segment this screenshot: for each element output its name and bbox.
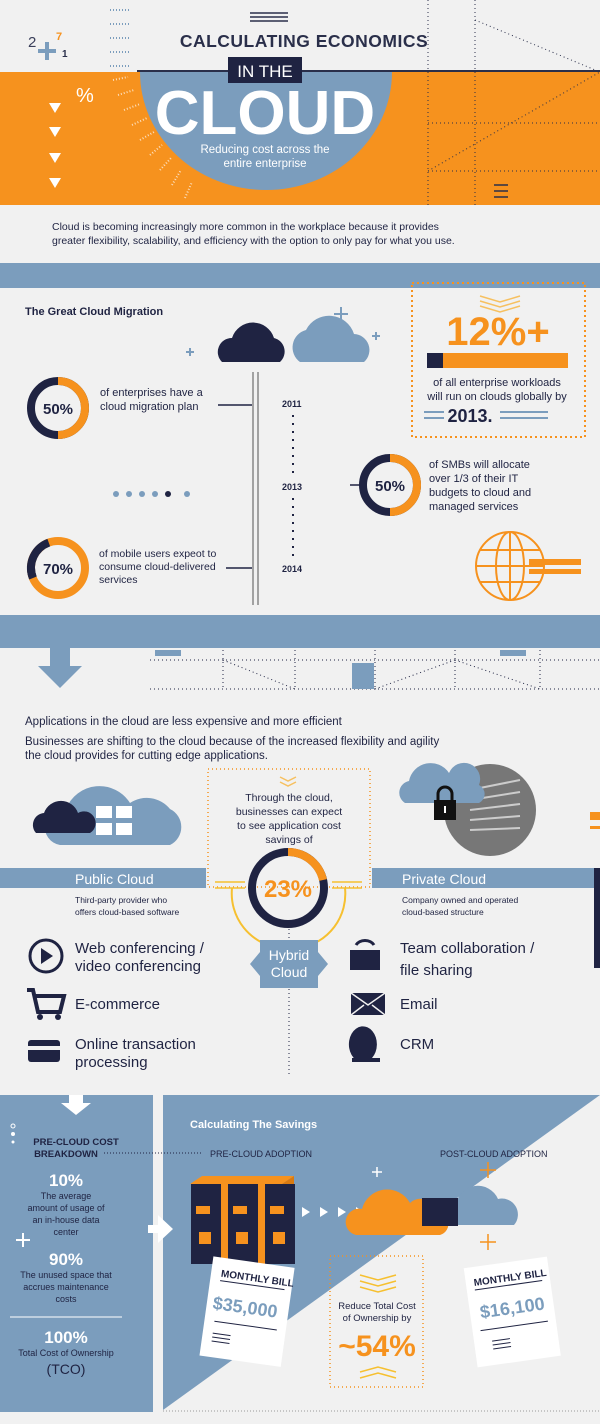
panel: calculating the savings: PRE-CLOUD ADOPTION xyxy=(210,1149,312,1159)
donut 50% SMB xyxy=(350,458,417,512)
icon: percent and arrows xyxy=(49,85,94,188)
heading: applications xyxy=(25,716,439,762)
dots xyxy=(113,491,190,497)
timeline: 2013 xyxy=(282,482,302,492)
callout 12%: will run on clouds globally by xyxy=(426,391,567,403)
donut 70%: 70% xyxy=(43,561,73,578)
text: public cloud desc: Third-party provider who xyxy=(75,895,167,905)
heading: applications: the cloud provides for cutting edge applications. xyxy=(25,750,268,762)
hybrid cloud: Cloud xyxy=(271,964,307,980)
bill $35,000: MONTHLY BILL xyxy=(220,1269,294,1290)
bar: private cloud: Private Cloud xyxy=(402,871,486,887)
divider bar 2 xyxy=(0,615,600,648)
panel: pre-cloud cost breakdown: BREAKDOWN xyxy=(34,1149,98,1160)
panel: pre-cloud cost breakdown: Total Cost of Ownership xyxy=(18,1348,114,1358)
list: public apps xyxy=(27,940,205,1071)
bill $16,100: MONTHLY BILL xyxy=(473,1268,547,1289)
decor right edge xyxy=(590,812,600,968)
callout 23%: to see application cost xyxy=(237,820,341,832)
timeline xyxy=(253,372,302,605)
panel: pre-cloud cost breakdown: 100% xyxy=(44,1328,88,1347)
divider bar xyxy=(0,263,600,288)
list: private apps xyxy=(349,940,535,1062)
icon: clouds xyxy=(186,307,380,362)
panel: calculating the savings xyxy=(104,1095,600,1411)
bill $16,100 xyxy=(464,1257,561,1367)
panel: calculating the savings: Calculating The Savings xyxy=(190,1119,317,1131)
timeline: 2011 xyxy=(282,399,302,409)
callout ~54% xyxy=(330,1256,423,1387)
bill $35,000: $35,000 xyxy=(212,1293,279,1322)
list: public apps: processing xyxy=(75,1054,148,1071)
list: public apps: E-commerce xyxy=(75,996,160,1013)
bar: public cloud: Public Cloud xyxy=(75,871,154,887)
text: public cloud desc xyxy=(75,895,180,917)
heading: applications: Businesses are shifting to the cloud because of the increased flexibility and agility xyxy=(25,736,439,748)
panel: pre-cloud cost breakdown: (TCO) xyxy=(47,1361,85,1377)
callout 23%: Through the cloud, xyxy=(245,792,333,804)
title: Reducing cost across the xyxy=(200,144,330,156)
text: public cloud desc: offers cloud-based software xyxy=(75,907,180,917)
panel: pre-cloud cost breakdown: center xyxy=(53,1227,79,1237)
panel: pre-cloud cost breakdown: The average xyxy=(41,1191,91,1201)
text: private desc: Company owned and operated xyxy=(402,895,519,905)
text: private desc: cloud-based structure xyxy=(402,907,484,917)
stat text 70% xyxy=(99,548,252,586)
stat text 70%: consume cloud-delivered xyxy=(99,561,216,573)
donut 70% xyxy=(23,541,85,595)
title: CLOUD xyxy=(155,79,375,148)
icon: post clouds xyxy=(346,1162,518,1250)
panel: pre-cloud cost breakdown: PRE-CLOUD COST xyxy=(33,1137,119,1148)
intro text xyxy=(52,221,455,247)
panel: pre-cloud cost breakdown: accrues maintenance xyxy=(23,1282,109,1292)
text: private desc xyxy=(402,895,519,917)
icon: lock cloud building xyxy=(399,763,536,856)
stat text SMB: of SMBs will allocate xyxy=(429,459,530,471)
icon: numbers plus xyxy=(28,31,68,60)
callout 12%: 12%+ xyxy=(446,310,550,354)
title xyxy=(155,31,428,170)
donut 50% xyxy=(31,381,85,435)
list: public apps: video conferencing xyxy=(75,958,201,975)
donut 50% SMB: 50% xyxy=(375,478,405,495)
decorative dotted structure xyxy=(150,650,600,690)
donut 50%: 50% xyxy=(43,401,73,418)
panel: pre-cloud cost breakdown: an in-house data xyxy=(32,1215,100,1225)
icon: servers xyxy=(190,1176,295,1264)
title: CALCULATING ECONOMICS xyxy=(180,31,428,51)
icon: percent and arrows: % xyxy=(76,85,94,107)
panel: pre-cloud cost breakdown: costs xyxy=(55,1294,77,1304)
callout ~54%: Reduce Total Cost xyxy=(338,1301,416,1312)
panel: pre-cloud cost breakdown xyxy=(0,1095,153,1412)
title: IN THE xyxy=(237,62,293,81)
panel: pre-cloud cost breakdown: amount of usage of xyxy=(27,1203,105,1213)
icon: numbers plus: 1 xyxy=(62,49,68,60)
stat text SMB: budgets to cloud and xyxy=(429,487,531,499)
bill $35,000 xyxy=(199,1256,296,1367)
panel: pre-cloud cost breakdown: The unused space that xyxy=(20,1270,112,1280)
list: private apps: Email xyxy=(400,996,438,1013)
callout ~54%: of Ownership by xyxy=(343,1313,412,1324)
heading: applications: Applications in the cloud are less expensive and more efficient xyxy=(25,716,343,728)
icon: numbers plus: 7 xyxy=(56,31,62,43)
header band xyxy=(0,0,600,205)
list: private apps: CRM xyxy=(400,1036,434,1053)
hybrid cloud xyxy=(250,925,328,1075)
callout 23% xyxy=(208,769,370,948)
stat text SMB: over 1/3 of their IT xyxy=(429,473,519,485)
callout 23%: savings of xyxy=(265,834,313,846)
callout ~54%: ~54% xyxy=(338,1330,416,1363)
stat text 70%: of mobile users expeot to xyxy=(99,548,216,560)
stat text SMB xyxy=(429,459,531,513)
intro text: Cloud is becoming increasingly more common in the workplace because it provides xyxy=(52,221,439,233)
title: entire enterprise xyxy=(223,158,307,170)
bar: private cloud xyxy=(372,868,600,888)
stat text SMB: managed services xyxy=(429,501,519,513)
callout 23%: businesses can expect xyxy=(236,806,342,818)
stat text 70%: services xyxy=(99,574,138,586)
list: public apps: Web conferencing / xyxy=(75,940,205,957)
callout 12%: 2013. xyxy=(447,406,493,426)
panel: pre-cloud cost breakdown: 90% xyxy=(49,1250,83,1269)
intro text: greater flexibility, scalability, and efficiency with the option to only pay for what you use. xyxy=(52,235,455,247)
hybrid cloud: Hybrid xyxy=(269,947,309,963)
panel: pre-cloud cost breakdown: 10% xyxy=(49,1171,83,1190)
bill $16,100: $16,100 xyxy=(479,1294,546,1322)
icon: numbers plus: 2 xyxy=(28,34,36,51)
list: public apps: Online transaction xyxy=(75,1036,196,1053)
stat text 50%: of enterprises have a xyxy=(100,387,204,399)
list: private apps: file sharing xyxy=(400,962,473,979)
stat text 50%: cloud migration plan xyxy=(100,401,198,413)
bar: public cloud xyxy=(0,868,206,888)
panel: calculating the savings: POST-CLOUD ADOPTION xyxy=(440,1149,548,1159)
callout 12%: of all enterprise workloads xyxy=(433,377,561,389)
callout 23%: 23% xyxy=(264,876,312,903)
icon: globe xyxy=(476,532,580,600)
arrow down xyxy=(38,648,82,688)
timeline: 2014 xyxy=(282,564,302,574)
list: private apps: Team collaboration / xyxy=(400,940,535,957)
heading: great cloud migration: The Great Cloud Migration xyxy=(25,306,163,318)
stat text 50% xyxy=(100,387,252,413)
icon: public clouds xyxy=(33,786,181,845)
callout 12% xyxy=(412,283,585,437)
